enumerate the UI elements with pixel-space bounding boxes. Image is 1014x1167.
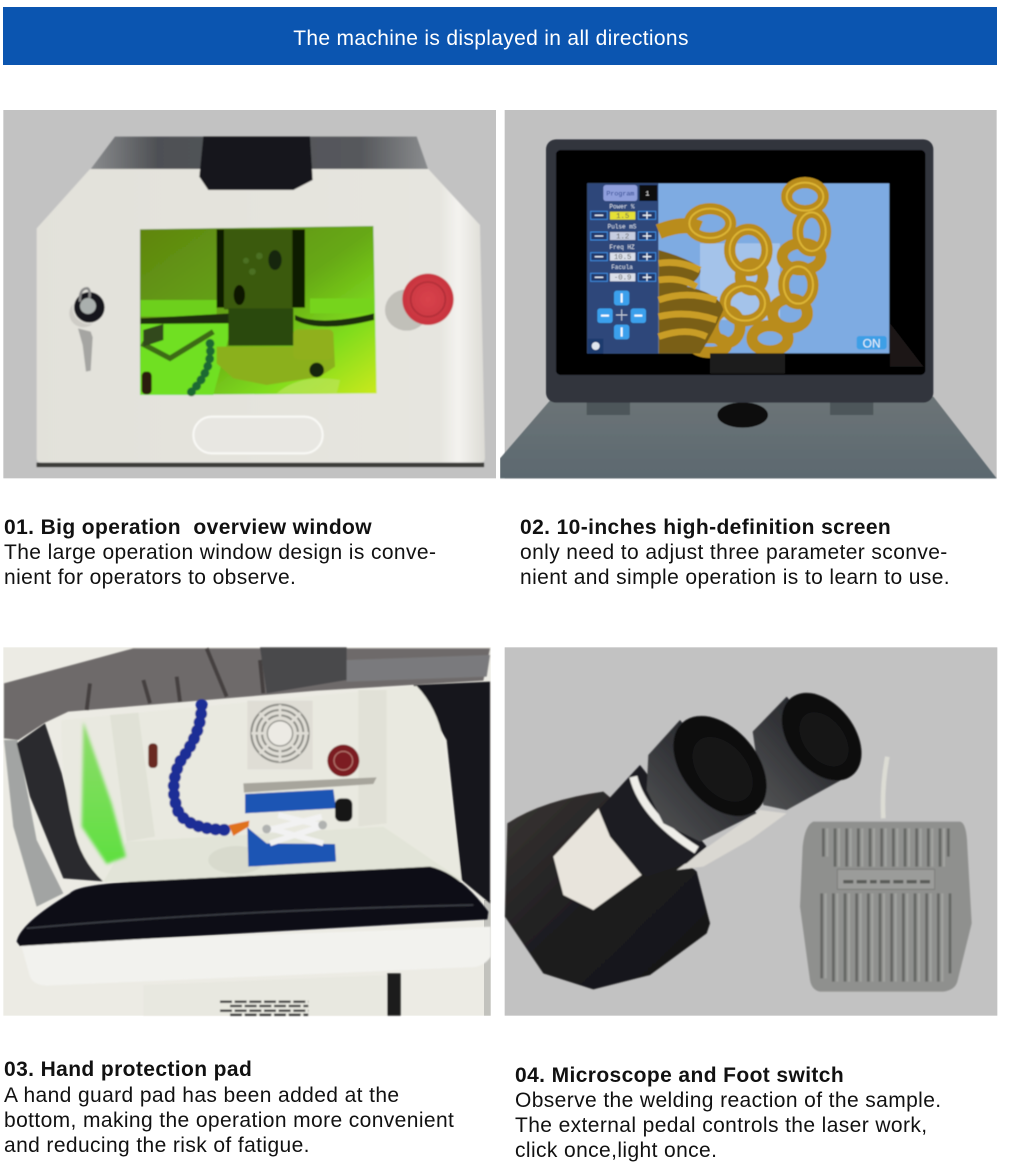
control panel buttons: 1.2 xyxy=(616,233,629,241)
reflection xyxy=(890,323,923,367)
caption 02: 02. 10-inches high-definition screen xyxy=(520,516,891,539)
foot pedal cable xyxy=(883,757,887,818)
caption 03 xyxy=(4,1058,454,1157)
title banner: The machine is displayed in all directions xyxy=(293,27,689,50)
caption 04: click once,light once. xyxy=(515,1139,717,1162)
white base xyxy=(21,927,491,986)
screen xyxy=(587,183,889,353)
caption 02: only need to adjust three parameter sconve- xyxy=(520,541,948,564)
control panel buttons: Power % xyxy=(609,204,635,211)
caption 02: nient and simple operation is to learn to use. xyxy=(520,566,950,589)
control panel buttons xyxy=(588,185,887,353)
machine front body xyxy=(37,169,485,462)
control panel buttons: Facula xyxy=(611,264,633,271)
control panel buttons: Program xyxy=(606,189,634,197)
panel: hand protection pad photo xyxy=(3,646,492,1017)
lift table xyxy=(243,777,377,867)
caption 04: The external pedal controls the laser work, xyxy=(515,1114,927,1137)
caption 01: 01. Big operation overview window xyxy=(4,516,372,539)
key switch xyxy=(69,288,106,372)
control panel buttons: Freq HZ xyxy=(609,244,635,251)
panel: microscope and foot switch photo xyxy=(504,647,998,1016)
caption 01: nient for operators to observe. xyxy=(4,566,296,589)
coolant hose xyxy=(174,705,230,830)
chain image xyxy=(659,183,826,352)
front eyepiece xyxy=(647,698,785,842)
panel: operation window photo xyxy=(3,110,496,478)
control panel buttons: Pulse mS xyxy=(608,224,637,231)
stop button xyxy=(327,745,359,777)
title banner xyxy=(3,7,997,65)
caption 04 xyxy=(515,1064,942,1162)
camera housing xyxy=(199,137,313,190)
interior housing xyxy=(61,686,462,882)
arm pad xyxy=(17,867,488,946)
emergency stop button xyxy=(385,274,454,331)
caption 03: bottom, making the operation more convenient xyxy=(4,1109,454,1132)
caption 03: 03. Hand protection pad xyxy=(4,1058,252,1081)
caption 02 xyxy=(520,516,950,589)
caption 04: Observe the welding reaction of the sample. xyxy=(515,1089,942,1112)
machine table top xyxy=(500,397,997,478)
control panel buttons: 10.5 xyxy=(614,254,631,262)
control panel buttons: ON xyxy=(863,336,881,350)
microscope base xyxy=(505,792,710,989)
monitor bezel xyxy=(546,139,933,403)
caption 04: 04. Microscope and Foot switch xyxy=(515,1064,844,1087)
left side frame xyxy=(4,740,63,907)
foot pedal xyxy=(800,822,972,992)
caption 01: The large operation window design is conve- xyxy=(4,541,436,564)
top arm xyxy=(4,648,490,740)
control panel buttons: 1 xyxy=(645,189,649,197)
indicator light xyxy=(148,743,158,768)
handle recess xyxy=(193,417,323,453)
green laser glow xyxy=(82,722,126,864)
monitor mount xyxy=(717,402,768,428)
viewing window xyxy=(140,226,377,395)
fan grille xyxy=(247,701,313,769)
vent slots xyxy=(220,1002,308,1015)
rear tube sliver xyxy=(677,810,787,870)
front tube xyxy=(553,765,707,910)
control panel buttons: -0.9 xyxy=(614,275,631,283)
caption 03: and reducing the risk of fatigue. xyxy=(4,1134,310,1157)
caption 03: A hand guard pad has been added at the xyxy=(4,1084,400,1107)
machine top xyxy=(90,137,428,170)
nozzle xyxy=(229,821,249,836)
control panel buttons: 1.5 xyxy=(616,213,629,221)
right side dark cover xyxy=(413,682,490,903)
caption 01 xyxy=(4,516,436,589)
rear eyepiece xyxy=(753,678,878,810)
panel: touch screen photo xyxy=(500,110,997,480)
